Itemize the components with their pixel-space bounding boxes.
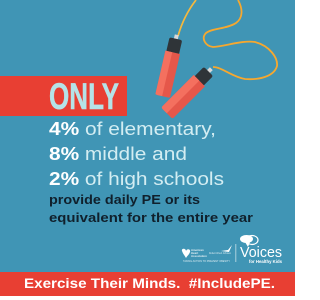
- logo text: American Heart Association: American: [191, 248, 204, 252]
- statistics text: 8% middle and: [49, 144, 187, 164]
- statistics text: [49, 119, 224, 189]
- logo text: Robert Wood Johnson Foundation: Robert Wood Johnson: [209, 251, 231, 255]
- description text: [49, 192, 253, 225]
- lower handle: [161, 63, 217, 119]
- logo text: American Heart Association: Association: [191, 254, 207, 258]
- logo text: for Healthy Kids: for Healthy Kids: [249, 259, 282, 264]
- logo text: American Heart Association: Heart: [191, 251, 198, 255]
- statistics text: 2% of high schools: [49, 169, 224, 189]
- statistics text: 4% of elementary,: [49, 119, 216, 139]
- logo text: Voices: Voices: [240, 244, 282, 261]
- banner: ONLY: ONLY: [49, 76, 119, 117]
- banner: ONLY: [0, 76, 127, 117]
- icon: jump rope: [155, 0, 277, 119]
- logos: [182, 235, 282, 264]
- description text: equivalent for the entire year: [49, 210, 253, 225]
- divider: [234, 244, 237, 262]
- footer banner: [0, 272, 295, 296]
- icon: heart logo: [182, 249, 190, 258]
- upper handle: [155, 33, 184, 98]
- icon: speech bubbles: [240, 235, 258, 247]
- description text: provide daily PE or its: [49, 192, 200, 207]
- icon: check mark: [221, 245, 232, 252]
- footer banner: Exercise Their Minds. #IncludePE.: [24, 275, 275, 291]
- logo text: American Heart Association: [191, 248, 207, 258]
- logo tagline: TAKING ACTION TO PREVENT OBESITY: [183, 259, 230, 263]
